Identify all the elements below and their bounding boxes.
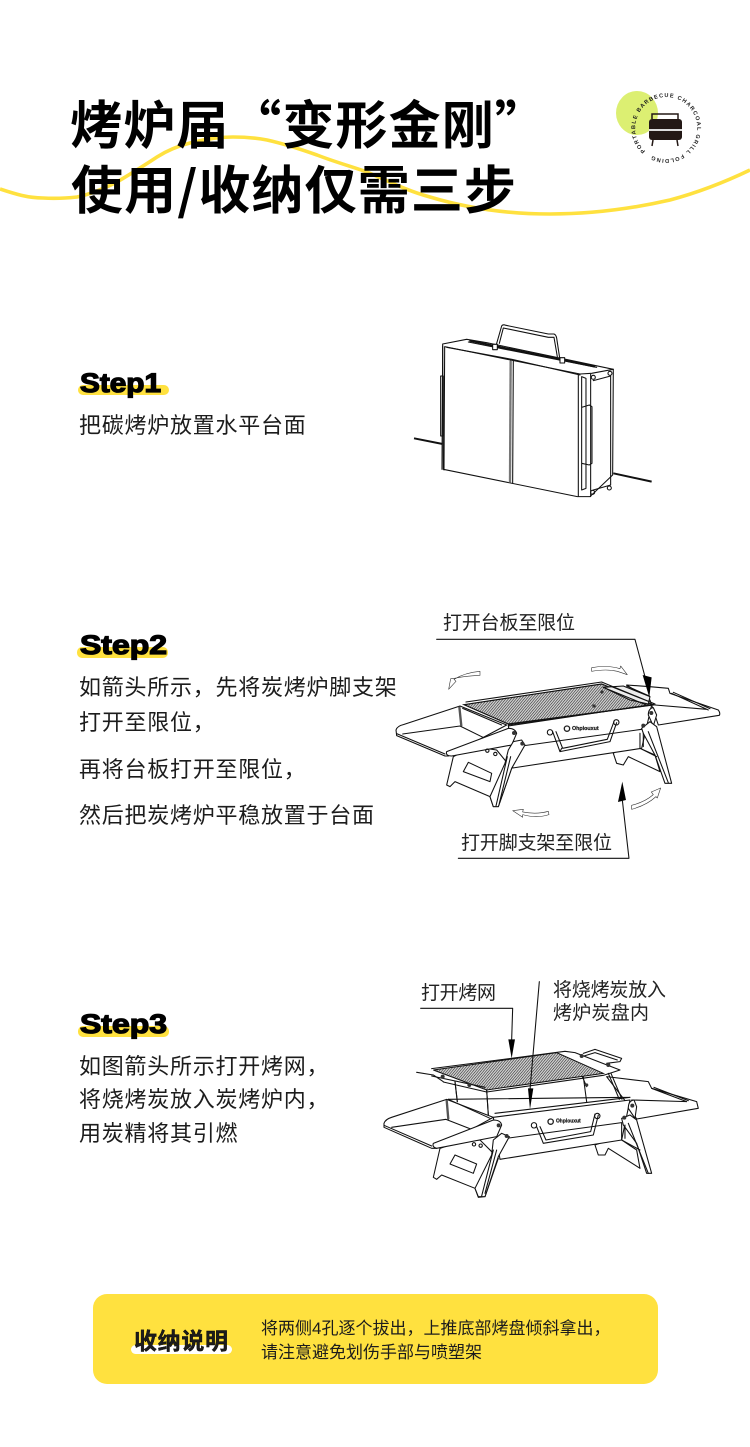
step 3 description xyxy=(79,1054,329,1146)
title xyxy=(70,84,548,224)
step 3 heading: Step3 xyxy=(80,1009,167,1039)
step 3 description: 将烧烤炭放入炭烤炉内， xyxy=(79,1087,329,1112)
rear foot and legs xyxy=(595,1138,640,1168)
label: open grate: 打开烤网 xyxy=(421,982,496,1004)
grill drawing xyxy=(384,982,698,1197)
step 3 description: 用炭精将其引燃 xyxy=(79,1121,238,1146)
brand logo: Ohpiouxut xyxy=(572,726,599,732)
handle xyxy=(537,1114,598,1143)
step 3 description: 如图箭头所示打开烤网， xyxy=(79,1054,329,1079)
brackets and front legs xyxy=(433,1120,502,1148)
label: put in charcoal: 将烧烤炭放入 xyxy=(553,979,666,1001)
grate xyxy=(464,684,653,724)
handle xyxy=(553,722,617,752)
panel: storage note xyxy=(93,1294,658,1384)
brand logo: Ohpiouxut xyxy=(556,1119,581,1125)
grate posts xyxy=(455,1073,619,1115)
left board xyxy=(384,1099,493,1148)
step 2 description xyxy=(79,675,398,828)
step 3 text block xyxy=(78,1009,329,1146)
grate handle and rods xyxy=(417,1049,622,1082)
label: open board: 打开台板至限位 xyxy=(443,612,575,634)
logo badge: portable barbecue: PORTABLE BARBECUE CHARCOAL GRILL FOLDING xyxy=(631,93,702,163)
storage note body: 请注意避免划伤手部与喷塑架 xyxy=(261,1343,482,1362)
decorative yellow wave xyxy=(0,137,750,214)
step 2 text block xyxy=(77,630,398,828)
right board xyxy=(627,685,720,725)
title: 烤炉届“变形金刚” xyxy=(70,84,548,159)
rotation arrows xyxy=(449,666,661,817)
illustration: grill with legs and side boards open xyxy=(396,612,720,858)
body xyxy=(508,705,652,768)
label: put in charcoal: 烤炉炭盘内 xyxy=(553,1002,649,1024)
label: open legs: 打开脚支架至限位 xyxy=(461,832,612,854)
illustration: grill with raised grate xyxy=(384,979,698,1197)
step 2 description: 如箭头所示，先将炭烤炉脚支架 xyxy=(79,675,398,700)
storage note body: 将两侧4孔逐个拔出，上推底部烤盘倾斜拿出， xyxy=(261,1318,610,1338)
step 1 text block xyxy=(78,368,307,438)
illustration: folded grill like a case xyxy=(414,325,652,497)
left board xyxy=(396,706,507,756)
step 2 description: 然后把炭烤炉平稳放置于台面 xyxy=(79,803,375,828)
brackets and front legs xyxy=(446,728,517,756)
step 1 heading: Step1 xyxy=(80,368,161,398)
leaders xyxy=(421,982,539,1090)
step 2 description: 再将台板打开至限位， xyxy=(79,757,307,782)
step 2 heading: Step2 xyxy=(80,630,167,660)
leaders xyxy=(437,639,645,677)
step 1 description: 把碳烤炉放置水平台面 xyxy=(79,413,307,438)
rear foot and legs xyxy=(613,747,660,772)
right board xyxy=(607,1077,698,1119)
storage note body xyxy=(261,1318,610,1362)
title: 使用/收纳仅需三步 xyxy=(71,149,517,224)
grill drawing xyxy=(396,639,720,858)
label: put in charcoal xyxy=(553,979,666,1024)
storage note heading: 收纳说明 xyxy=(134,1328,228,1354)
body xyxy=(493,1100,630,1159)
step 2 description: 打开至限位， xyxy=(79,710,216,735)
